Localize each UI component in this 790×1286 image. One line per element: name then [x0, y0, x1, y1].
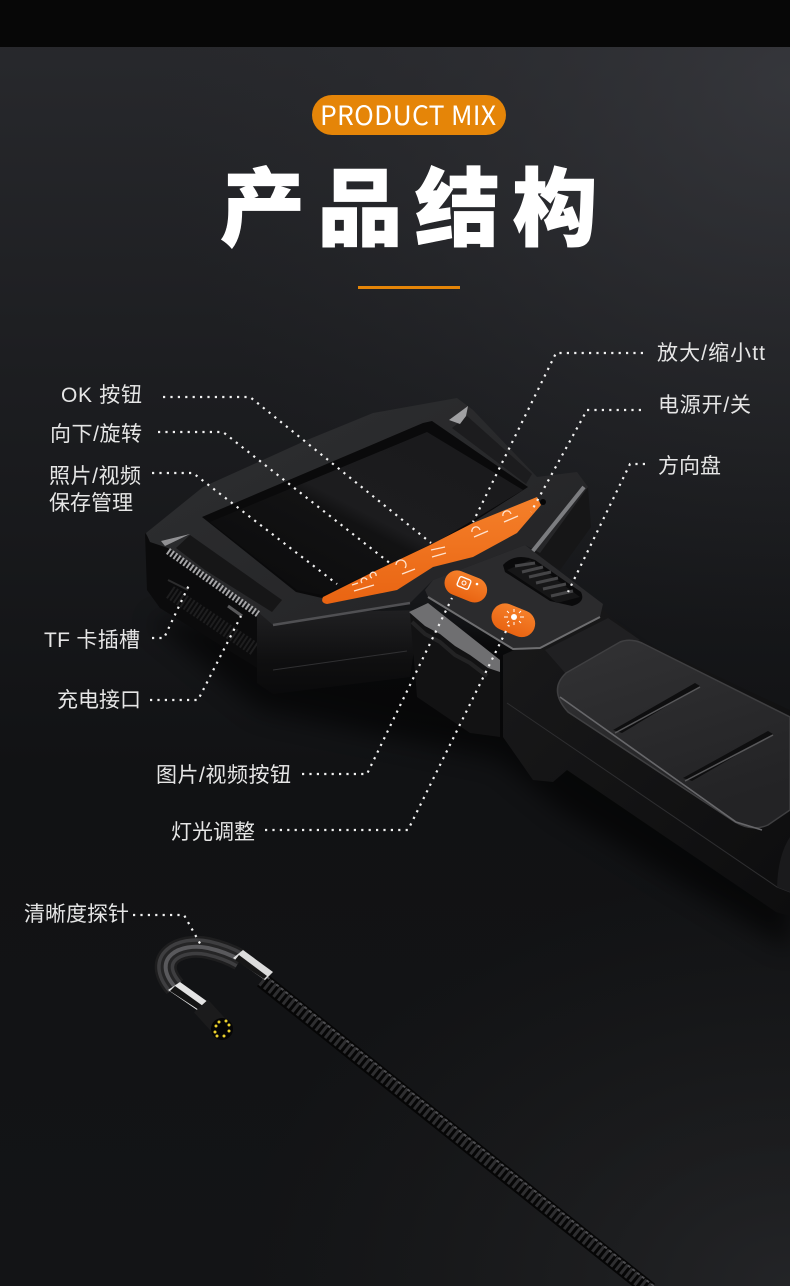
label: 灯光调整: 灯光调整 [171, 821, 255, 844]
device side with ports [145, 533, 262, 668]
title underline [358, 286, 460, 289]
serrated edge [168, 551, 258, 614]
bezel highlights [161, 406, 584, 625]
bezel right side [530, 487, 591, 570]
probe tube [262, 977, 655, 1286]
badge: PRODUCT MIX: PRODUCT MIX [320, 94, 496, 133]
label: TF 卡插槽: TF 卡插槽 [44, 629, 140, 652]
probe cable [166, 947, 655, 1286]
label: 照片/视频 保存管理: 保存管理 [49, 492, 133, 515]
label: 图片/视频按钮: 图片/视频按钮 [156, 764, 291, 787]
label: 放大/缩小tt: 放大/缩小tt [657, 342, 765, 365]
button: light [487, 599, 539, 641]
handle [503, 610, 790, 916]
orange button strip [322, 497, 546, 604]
probe head with LEDs [201, 1006, 233, 1040]
screen [202, 421, 528, 598]
label: 清晰度探针: 清晰度探针 [24, 903, 129, 926]
probe metal collars [168, 950, 273, 1012]
port details [168, 580, 256, 650]
label: 电源开/关: 电源开/关 [658, 394, 751, 417]
monitor bezel [146, 398, 588, 625]
button: photo / video [441, 567, 491, 606]
handle control panel [425, 545, 603, 650]
scroll wheel [503, 557, 582, 606]
label: 照片/视频 保存管理 [49, 465, 141, 515]
device: inspection camera [145, 398, 790, 950]
label: 向下/旋转: 向下/旋转 [50, 423, 142, 446]
label: 充电接口: 充电接口 [57, 689, 141, 712]
callout lines [133, 353, 645, 947]
label: 方向盘: 方向盘 [658, 455, 721, 478]
probe bend [166, 947, 240, 987]
label: OK 按钮: OK 按钮 [61, 384, 142, 407]
label: 照片/视频 保存管理: 照片/视频 [49, 465, 141, 488]
monitor front face [257, 610, 420, 694]
notched block [409, 603, 500, 737]
title: 产品结构 [220, 141, 610, 264]
handle grip [557, 640, 790, 830]
device shadow [150, 620, 790, 950]
